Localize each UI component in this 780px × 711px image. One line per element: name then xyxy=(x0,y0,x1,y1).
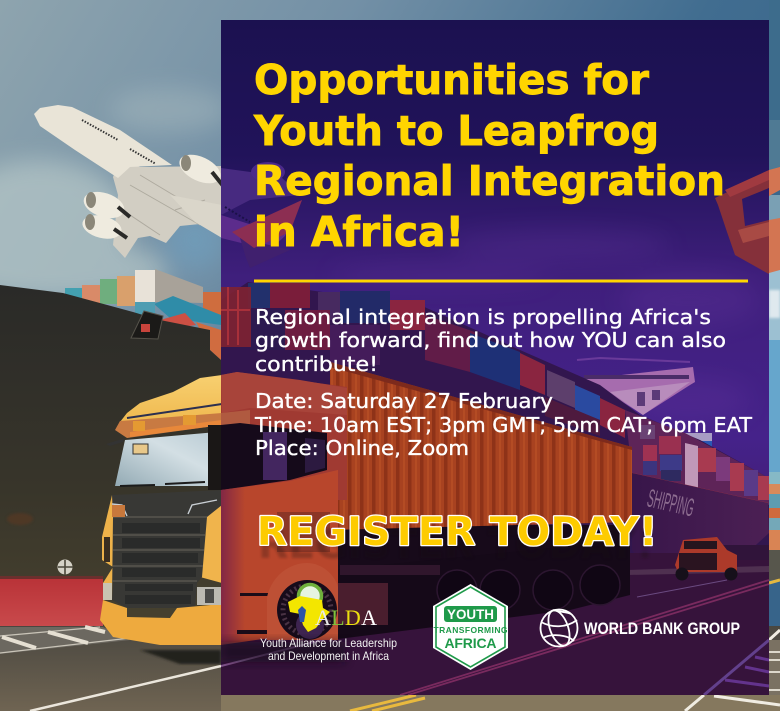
cab side window xyxy=(221,423,327,490)
funnel xyxy=(683,433,712,441)
tinted container stacks xyxy=(221,282,769,560)
title: Youth to Leapfrog xyxy=(253,107,659,155)
truck bumper xyxy=(100,600,222,645)
YALDA africa shape xyxy=(288,596,330,632)
airplane engine lower xyxy=(80,211,127,243)
logo: World Bank Group xyxy=(540,608,740,648)
intro text: growth forward, find out how YOU can also xyxy=(255,328,726,352)
white hull emblem xyxy=(58,560,73,575)
event details: Date: Saturday 27 February xyxy=(255,389,553,413)
front wheel xyxy=(277,580,337,640)
airplane engine middle xyxy=(80,187,130,223)
tinted road and far bank xyxy=(221,545,769,695)
tinted crane base at panel left xyxy=(221,287,251,347)
crane arm outside panel xyxy=(769,167,780,273)
intro text: Regional integration is propelling Africa's xyxy=(255,305,711,329)
truck mirror xyxy=(106,438,148,454)
photo: road surface xyxy=(0,550,780,711)
YALDA caption xyxy=(260,636,397,663)
containers at right edge xyxy=(769,472,780,550)
truck windshield xyxy=(115,432,217,486)
tinted clouds xyxy=(486,235,740,406)
photo: ship hull left side xyxy=(0,285,221,627)
event details xyxy=(254,389,753,460)
rust patches xyxy=(7,513,33,525)
logo: Youth Transforming Africa: AFRICA xyxy=(444,635,496,651)
YALDA caption: Youth Alliance for Leadership xyxy=(260,636,397,650)
truck sun visor xyxy=(115,413,222,438)
truck shadow xyxy=(220,642,345,662)
truck grille xyxy=(112,490,222,608)
event details: Time: 10am EST; 3pm GMT; 5pm CAT; 6pm EAT xyxy=(254,413,753,437)
intro text: contribute! xyxy=(255,352,378,376)
cab lower body xyxy=(221,597,267,645)
World Bank globe xyxy=(540,608,578,648)
airplane wing xyxy=(113,160,222,258)
YALDA caption: and Development in Africa xyxy=(268,649,389,663)
truck roof xyxy=(120,375,222,425)
tinted airplane tail and wing xyxy=(221,162,302,268)
yellow divider rule xyxy=(254,280,748,282)
airplane fuselage xyxy=(34,105,172,178)
tinted deck containers xyxy=(625,410,769,505)
World Bank wordmark: WORLD BANK GROUP xyxy=(584,620,740,638)
truck chrome vents xyxy=(112,500,217,516)
YALDA ring xyxy=(298,584,322,608)
purple panel with tinted photo xyxy=(220,20,769,695)
wheel arch xyxy=(267,563,338,640)
ship name: SHIPPING xyxy=(645,485,697,523)
airplane windows xyxy=(82,120,156,164)
title: Opportunities for xyxy=(254,56,650,104)
airplane engine upper xyxy=(175,149,225,189)
register today call to action: REGISTER TODAY! xyxy=(257,510,657,555)
tinted truck trailer xyxy=(330,362,632,530)
crane arm over the right panel edge xyxy=(715,167,780,274)
logo: Youth Transforming Africa xyxy=(433,584,508,670)
intro text xyxy=(255,305,726,376)
airplane xyxy=(34,105,225,258)
tinted truck cab xyxy=(220,372,388,662)
title: Regional Integration xyxy=(254,157,725,205)
truck yellow side right xyxy=(200,500,222,583)
truck headlights xyxy=(103,583,222,605)
logo: Youth Transforming Africa: YOUTH xyxy=(447,606,494,622)
tinted ship hull xyxy=(632,473,769,560)
white deck column xyxy=(685,443,698,490)
photo: containers on ship, left part xyxy=(65,269,221,360)
register today call to action: REGISTER TODAY! xyxy=(258,523,654,568)
tinted truck chassis and wheels xyxy=(330,525,630,640)
truck cab, left part xyxy=(100,375,222,664)
title: in Africa! xyxy=(254,208,464,256)
truck yellow side left xyxy=(102,495,116,600)
cab upper xyxy=(221,372,347,500)
cab body xyxy=(221,470,338,593)
sky strip at right edge xyxy=(769,0,780,472)
logo: YALDA xyxy=(260,584,397,663)
tinted pickup truck xyxy=(675,537,738,580)
tinted ship superstructure xyxy=(577,358,712,453)
event details: Place: Online, Zoom xyxy=(255,436,469,460)
logo: Youth Transforming Africa: TRANSFORMING xyxy=(434,625,508,635)
ship hatch detail xyxy=(131,311,163,339)
title xyxy=(253,56,725,256)
red quay band xyxy=(0,579,103,627)
YALDA wordmark: ALDA xyxy=(315,605,377,630)
